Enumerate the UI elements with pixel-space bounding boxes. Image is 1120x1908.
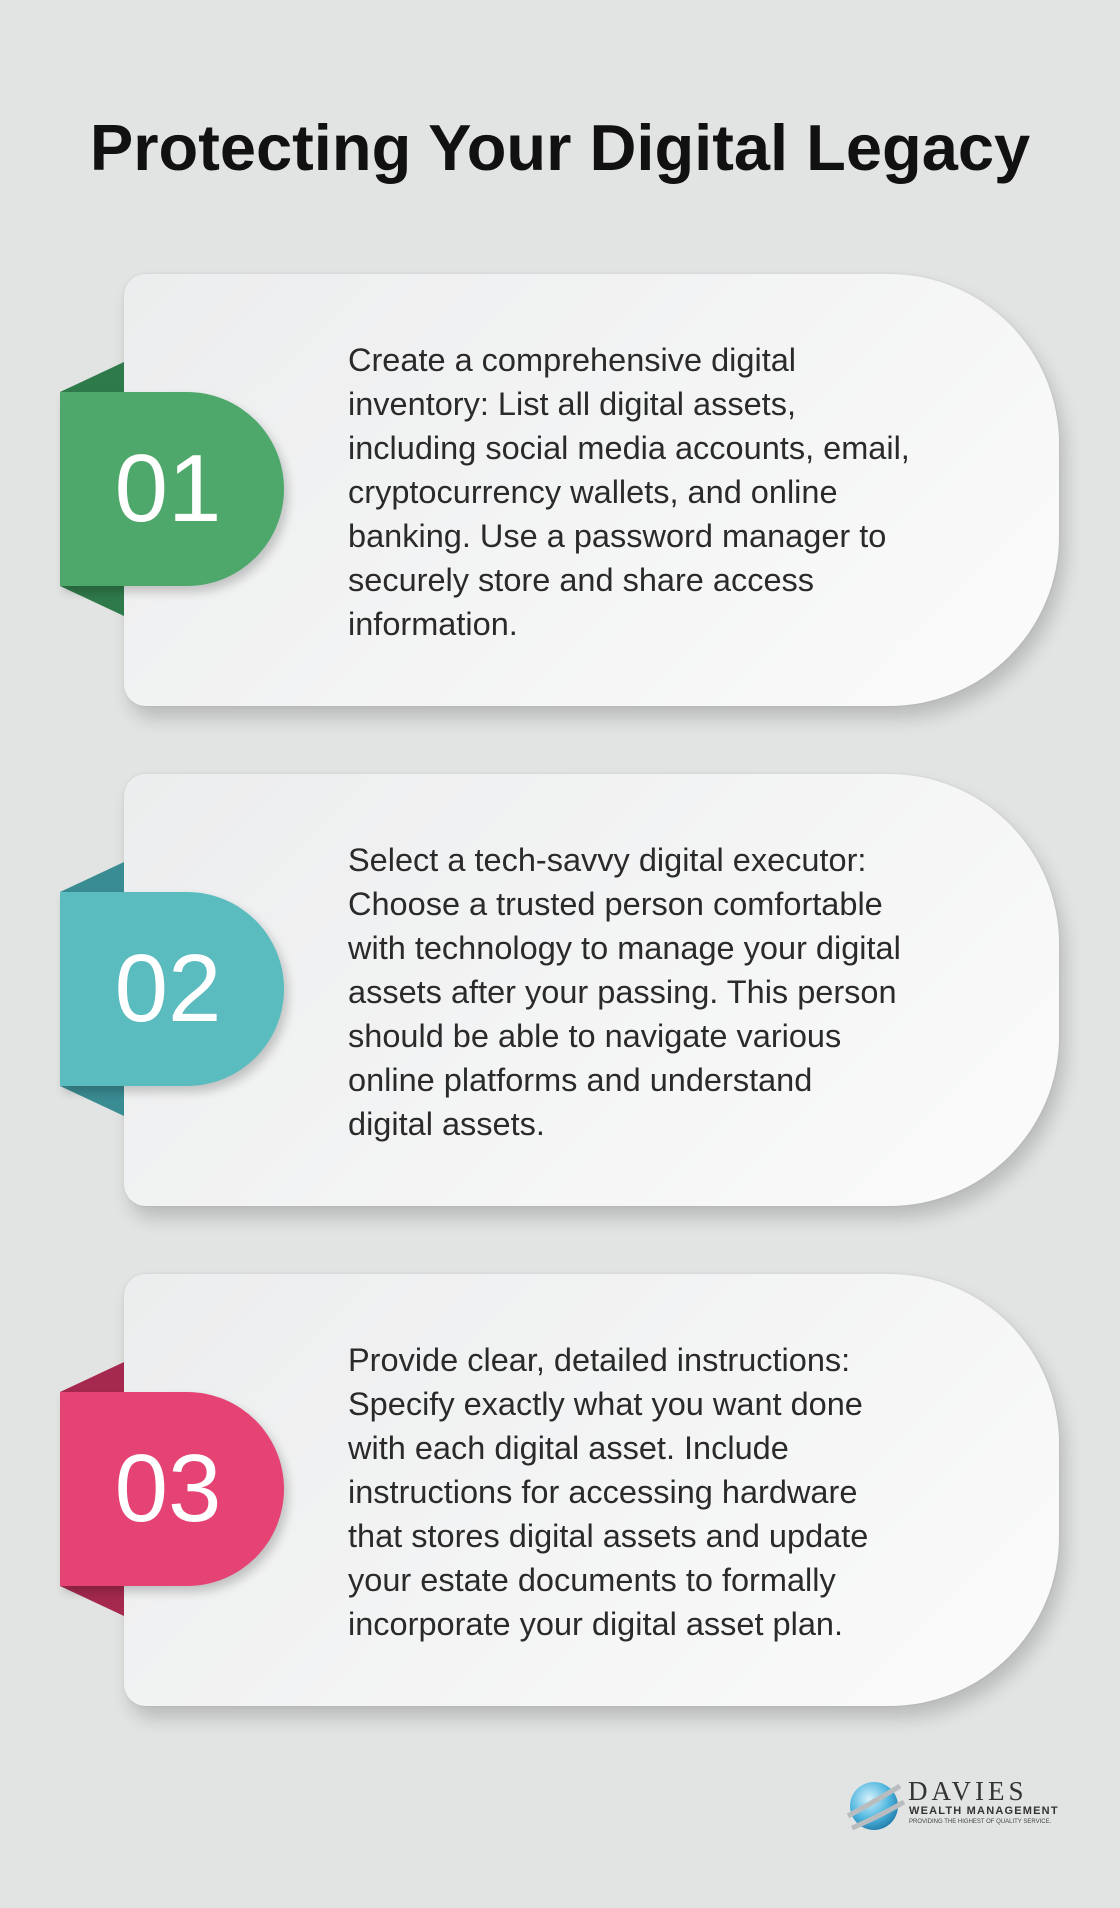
badge 03: 03: [115, 1435, 221, 1542]
text 01: cryptocurrency wallets, and online: [348, 474, 838, 510]
card 03: [124, 1274, 1059, 1706]
logo: [847, 1776, 1059, 1830]
text 02: with technology to manage your digital: [348, 930, 901, 966]
logo: PROVIDING THE HIGHEST OF QUALITY SERVICE.: [909, 1819, 1051, 1825]
text 01: information.: [348, 606, 518, 642]
text 01: banking. Use a password manager to: [348, 518, 886, 554]
badge 03: [60, 1362, 292, 1616]
panel: step 01: [60, 273, 1072, 726]
text 02: should be able to navigate various: [348, 1018, 841, 1054]
text 01: Create a comprehensive digital: [348, 342, 796, 378]
text 03: [348, 1342, 868, 1642]
text 03: incorporate your digital asset plan.: [348, 1606, 843, 1642]
text 01: inventory: List all digital assets,: [348, 386, 796, 422]
text 02: online platforms and understand: [348, 1062, 812, 1098]
logo: WEALTH MANAGEMENT: [909, 1805, 1059, 1817]
text 03: that stores digital assets and update: [348, 1518, 868, 1554]
badge 02: 02: [115, 935, 221, 1042]
text 03: your estate documents to formally: [348, 1562, 836, 1598]
card 01: [124, 274, 1059, 706]
text 02: Select a tech-savvy digital executor:: [348, 842, 866, 878]
text 03: with each digital asset. Include: [348, 1430, 789, 1466]
badge 01: 01: [115, 435, 221, 542]
badge 01: [60, 362, 292, 616]
card 02: [124, 774, 1059, 1206]
panel: step 03: [60, 1273, 1072, 1726]
icon: globe: [847, 1782, 905, 1830]
text 02: [348, 842, 901, 1142]
text 01: [348, 342, 910, 642]
logo text: DAVIES: [908, 1776, 1028, 1806]
text 01: securely store and share access: [348, 562, 814, 598]
panel: step 02: [60, 773, 1072, 1226]
text 02: digital assets.: [348, 1106, 545, 1142]
title: Protecting Your Digital Legacy: [90, 111, 1030, 184]
text 02: assets after your passing. This person: [348, 974, 897, 1010]
text 03: Provide clear, detailed instructions:: [348, 1342, 850, 1378]
text 02: Choose a trusted person comfortable: [348, 886, 883, 922]
text 01: including social media accounts, email,: [348, 430, 910, 466]
text 03: Specify exactly what you want done: [348, 1386, 863, 1422]
text 03: instructions for accessing hardware: [348, 1474, 857, 1510]
badge 02: [60, 862, 292, 1116]
